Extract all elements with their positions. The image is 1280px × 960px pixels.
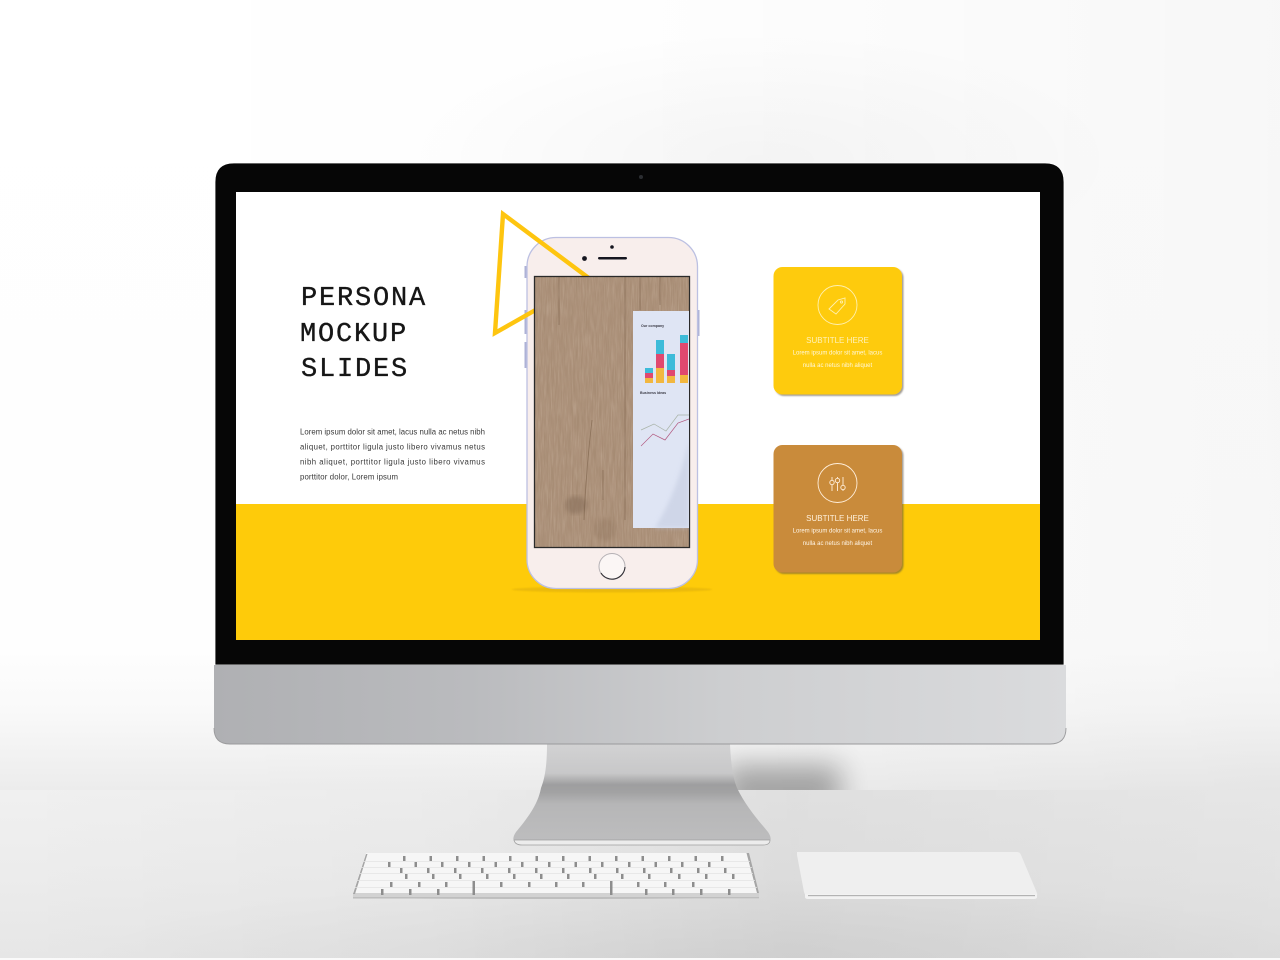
keyboard (353, 853, 759, 899)
card text: Lorem ipsum dolor sit amet, lacus (793, 350, 882, 356)
body text (300, 428, 485, 482)
monitor bezel (215, 163, 1064, 665)
webcam (639, 175, 643, 179)
icon: sliders (818, 464, 857, 502)
paper with charts (633, 311, 689, 528)
line chart (641, 415, 689, 446)
phone body (527, 238, 698, 588)
icon: price tag (818, 286, 857, 324)
phone speaker (598, 257, 627, 260)
card background (774, 445, 902, 572)
trackpad (797, 852, 1037, 899)
bar chart (645, 335, 688, 383)
wood texture (535, 277, 689, 547)
title: PERSONA (301, 284, 427, 314)
monitor stand (513, 744, 771, 845)
body text: Lorem ipsum dolor sit amet, lacus nulla ac netus nibh (300, 428, 485, 436)
monitor body (214, 163, 1066, 744)
card text: nulla ac netus nibh aliquet (803, 363, 873, 369)
phone (495, 214, 712, 592)
card heading: SUBTITLE HERE (806, 336, 869, 345)
paper with charts: Business Ideas (640, 391, 666, 395)
card: sliders (774, 445, 902, 572)
slide screen (236, 192, 1040, 640)
title (300, 284, 427, 385)
card text: Lorem ipsum dolor sit amet, lacus (793, 528, 882, 534)
title: MOCKUP (300, 320, 408, 350)
triangle outline (495, 214, 590, 333)
phone screen (534, 276, 690, 548)
yellow band (236, 504, 1040, 640)
key gaps (381, 856, 734, 895)
phone front sensor (582, 256, 587, 261)
card: tag (774, 267, 902, 394)
phone camera (610, 245, 614, 249)
title: SLIDES (301, 355, 409, 385)
body text: aliquet, porttitor ligula justo libero vivamus netus (300, 442, 485, 452)
card text (793, 528, 882, 547)
phone side buttons (524, 266, 700, 368)
monitor chin (214, 665, 1066, 744)
background: desk (0, 790, 1280, 960)
card background (774, 267, 902, 394)
body text: porttitor dolor, Lorem ipsum (300, 472, 398, 482)
card text (793, 350, 882, 369)
body text: nibh aliquet, porttitor ligula justo libero vivamus (300, 458, 485, 466)
phone ground shadow (512, 586, 712, 592)
card heading: SUBTITLE HERE (806, 514, 869, 523)
home button (599, 554, 625, 580)
paper with charts: Our company (641, 324, 664, 328)
card text: nulla ac netus nibh aliquet (803, 541, 873, 547)
